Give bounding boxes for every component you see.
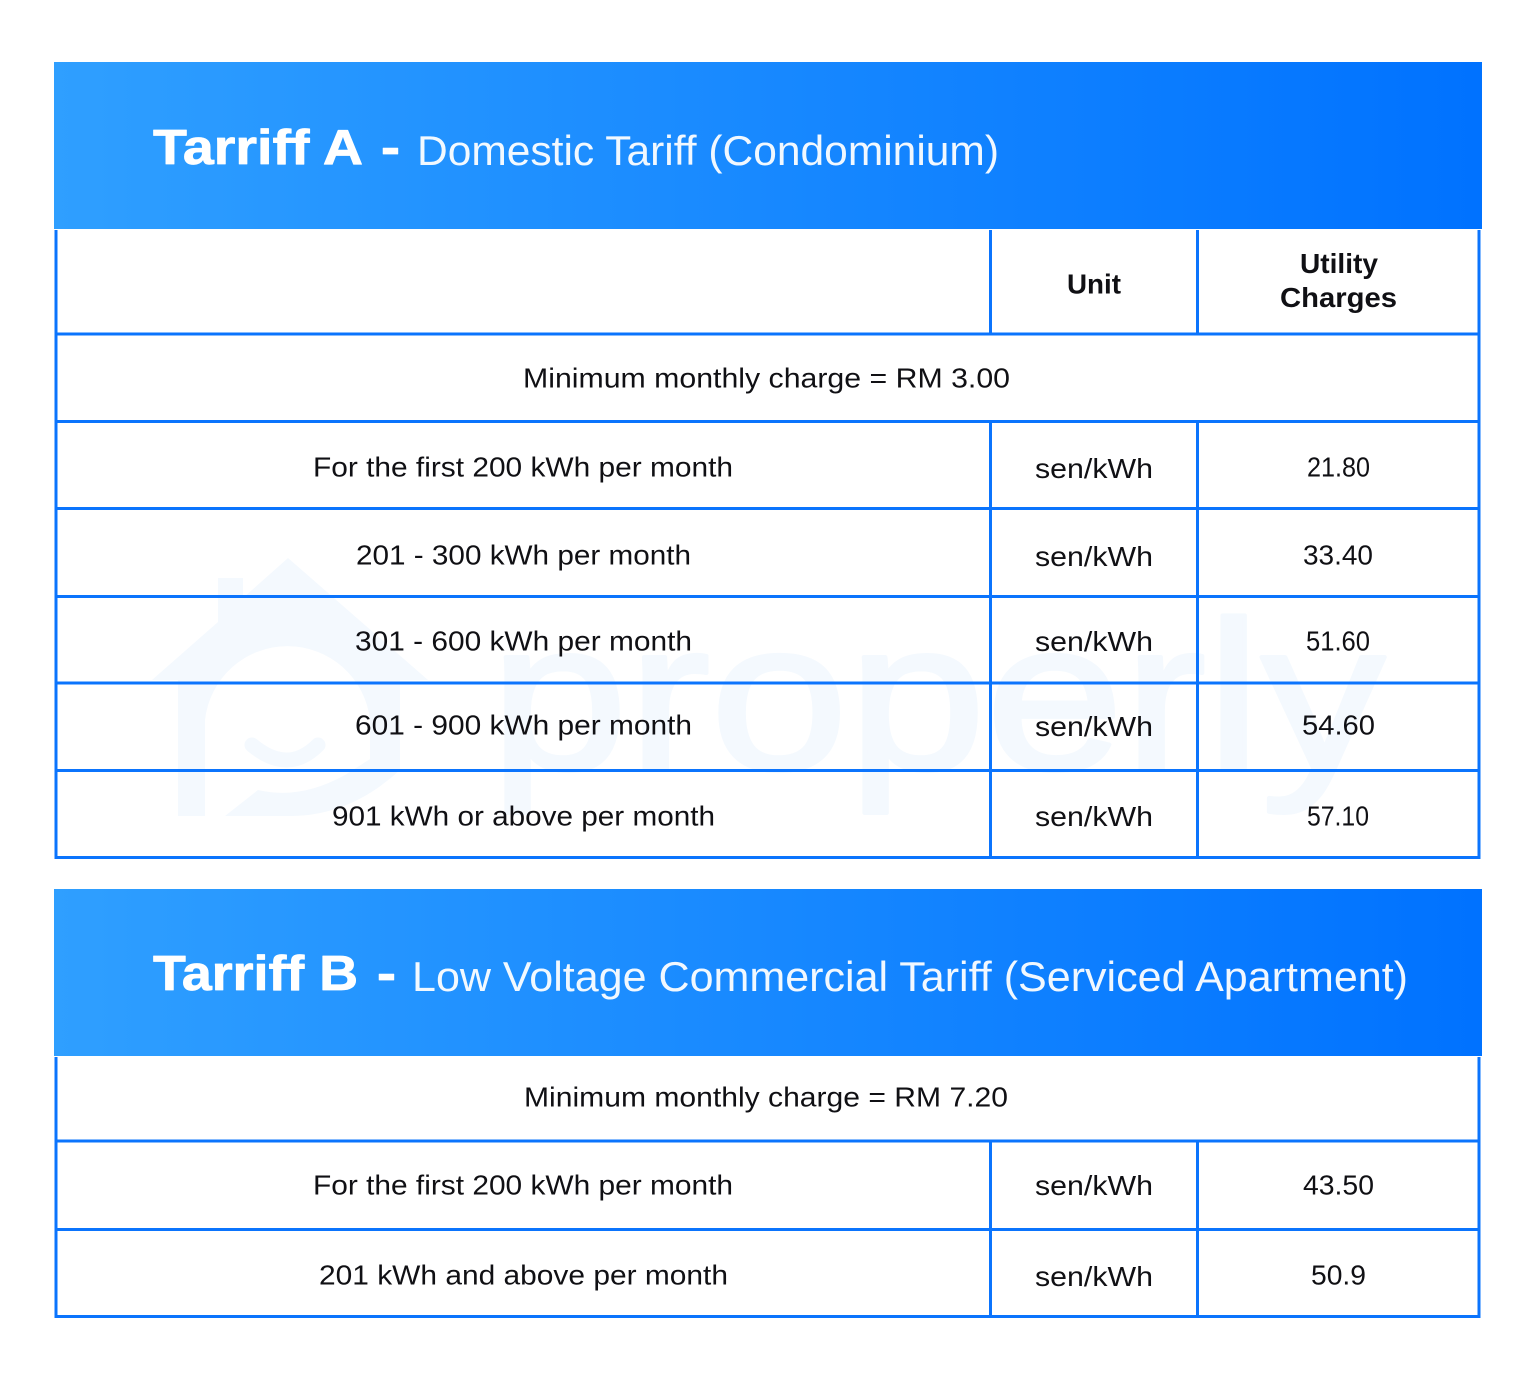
column headings: Charges	[1280, 282, 1397, 313]
header: tariff A	[54, 62, 1482, 229]
row: 901 kWh or above: sen/kWh	[1035, 801, 1153, 832]
row: 201 kWh and above: sen/kWh	[1035, 1261, 1153, 1292]
row: 901 kWh or above: 57.10	[1307, 800, 1369, 832]
panel: tariff B	[54, 889, 1482, 1316]
minimum charge A: Minimum monthly charge = RM 3.00	[523, 362, 1010, 394]
row: 601-900 kWh: 54.60	[1302, 710, 1375, 740]
watermark word: properly	[490, 577, 1385, 814]
table grid A	[56, 230, 1479, 858]
row: first 200 kWh: For the first 200 kWh per month	[313, 452, 733, 482]
row: 301-600 kWh: sen/kWh	[1035, 626, 1153, 657]
row: first 200 kWh: sen/kWh	[1035, 1170, 1153, 1201]
header: tariff B: Tarriff B	[153, 947, 358, 1001]
row: first 200 kWh: 43.50	[1303, 1170, 1374, 1200]
header: tariff A: Domestic Tariff (Condominium)	[417, 127, 999, 174]
row: 301-600 kWh	[355, 626, 1370, 657]
row: 901 kWh or above	[332, 800, 1369, 832]
row: 301-600 kWh: 301 - 600 kWh per month	[355, 626, 692, 656]
panel: tariff A	[54, 62, 1482, 858]
row: first 200 kWh: 21.80	[1307, 452, 1370, 482]
row: 201 kWh and above: 201 kWh and above per month	[319, 1260, 728, 1290]
header: tariff B: -	[377, 947, 396, 1001]
watermark: properly logo	[152, 558, 1385, 816]
row: first 200 kWh: For the first 200 kWh per month	[313, 1170, 733, 1200]
header: tariff A: Tarriff A	[153, 121, 363, 175]
header: tariff A: -	[381, 121, 400, 175]
column headings: Utility	[1300, 248, 1378, 279]
header: tariff B	[54, 889, 1482, 1056]
row: 201-300 kWh: 33.40	[1303, 540, 1373, 570]
column headings	[1067, 248, 1397, 313]
minimum charge B: Minimum monthly charge = RM 7.20	[524, 1082, 1008, 1112]
row: first 200 kWh: sen/kWh	[1035, 453, 1153, 484]
row: 301-600 kWh: 51.60	[1306, 626, 1370, 656]
row: 201 kWh and above: 50.9	[1311, 1260, 1366, 1290]
row: first 200 kWh	[313, 452, 1370, 484]
table grid B	[56, 1057, 1479, 1316]
column headings: Unit	[1067, 268, 1121, 300]
row: 601-900 kWh: 601 - 900 kWh per month	[355, 710, 692, 740]
row: 201-300 kWh: sen/kWh	[1035, 541, 1153, 572]
row: 601-900 kWh	[355, 710, 1375, 742]
row: 201 kWh and above	[319, 1260, 1366, 1292]
row: 901 kWh or above: 901 kWh or above per month	[332, 800, 715, 832]
header: tariff B: Low Voltage Commercial Tariff (Serviced Apartment)	[412, 953, 1408, 1000]
row: first 200 kWh	[313, 1170, 1374, 1201]
row: 201-300 kWh	[356, 540, 1373, 572]
row: 201-300 kWh: 201 - 300 kWh per month	[356, 540, 691, 570]
row: 601-900 kWh: sen/kWh	[1035, 711, 1153, 742]
icon: house logo	[152, 558, 428, 816]
